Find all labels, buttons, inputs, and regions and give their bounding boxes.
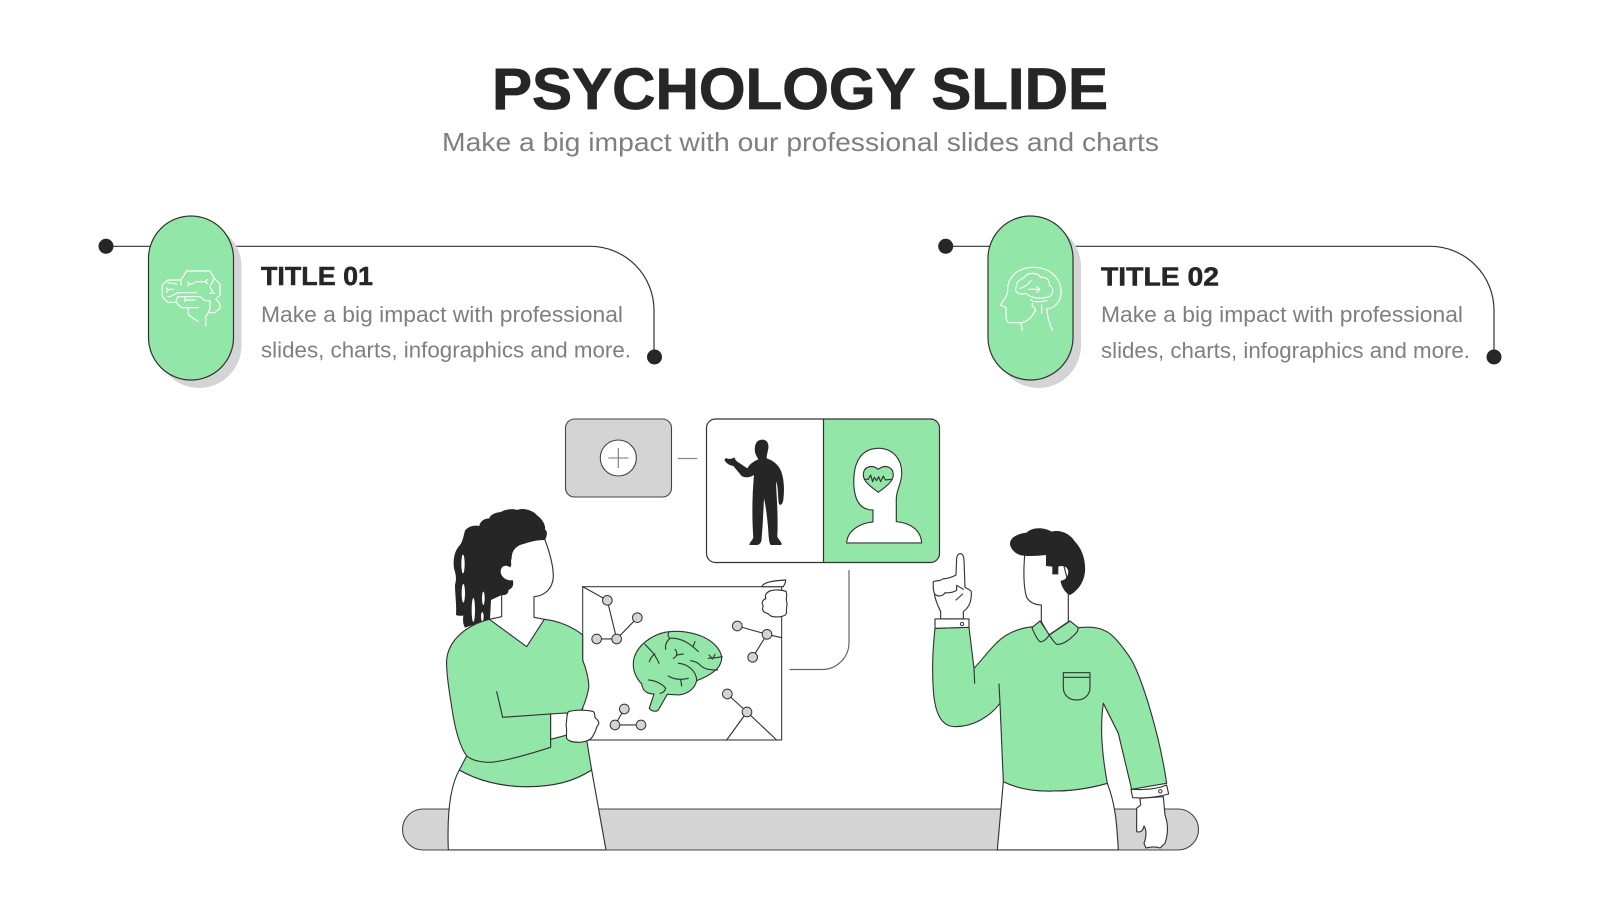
- pocket: [1063, 673, 1090, 700]
- floor bar: [402, 809, 1198, 850]
- trousers: [997, 782, 1118, 850]
- collar: [1032, 621, 1078, 644]
- connector line 01: [106, 246, 654, 357]
- woman: [447, 509, 606, 850]
- icon: person silhouette: [724, 440, 784, 545]
- panel: title 01: [98, 216, 662, 388]
- icon: circuit brain: [162, 271, 220, 326]
- arm outline: [467, 692, 551, 762]
- raised hand: [933, 554, 971, 619]
- hand: [566, 710, 599, 742]
- screen panel: [706, 419, 940, 562]
- pill 01: [148, 216, 234, 380]
- text: title 01 body: slides, charts, infographics and more.: [261, 338, 631, 362]
- plus button panel: [566, 419, 672, 497]
- title: PSYCHOLOGY SLIDE: [492, 57, 1108, 122]
- skirt: [448, 770, 606, 850]
- text: title 01 body: [261, 302, 631, 362]
- pill shadow 02: [996, 224, 1081, 388]
- connector dot start 02: [938, 239, 953, 254]
- heading: title 01: TITLE 01: [261, 261, 373, 291]
- text: title 02 body: slides, charts, infographics and more.: [1101, 338, 1470, 363]
- lower cuff: [1131, 785, 1169, 798]
- network nodes: [592, 595, 772, 730]
- sweater: [447, 619, 592, 787]
- pill shadow 01: [156, 224, 242, 388]
- cuff: [551, 713, 567, 739]
- hair: [454, 509, 547, 628]
- connector dot end 02: [1486, 350, 1502, 364]
- raised cuff: [935, 619, 969, 628]
- text: title 02 body: [1101, 302, 1470, 363]
- connector from board to screen: [790, 570, 849, 670]
- icon: head with brain: [1001, 267, 1061, 331]
- man: [933, 528, 1167, 850]
- hair: [1010, 528, 1085, 595]
- man lower hand: [1131, 785, 1169, 848]
- connector dot end 01: [647, 350, 662, 364]
- icon: head with heart: [847, 448, 922, 543]
- neck and face: [1024, 550, 1068, 635]
- hand on board corner: [762, 580, 787, 617]
- pill 02: [988, 216, 1073, 380]
- text: title 01 body: Make a big impact with professional: [261, 302, 623, 327]
- connector dot start 01: [98, 239, 114, 254]
- board chart: [583, 580, 787, 740]
- shirt: [933, 622, 1167, 791]
- dash connector: [678, 458, 697, 460]
- heading: title 02: TITLE 02: [1101, 262, 1219, 292]
- network lines: [583, 587, 782, 740]
- text: title 02 body: Make a big impact with professional: [1101, 302, 1463, 327]
- arm creases: [974, 668, 1000, 703]
- icon: green brain: [633, 631, 722, 711]
- neck and face: [489, 540, 553, 647]
- subtitle: Make a big impact with our professional slides and charts: [442, 127, 1159, 157]
- icon: plus: [600, 440, 636, 476]
- panel: title 02: [938, 216, 1502, 388]
- connector line 02: [946, 246, 1494, 357]
